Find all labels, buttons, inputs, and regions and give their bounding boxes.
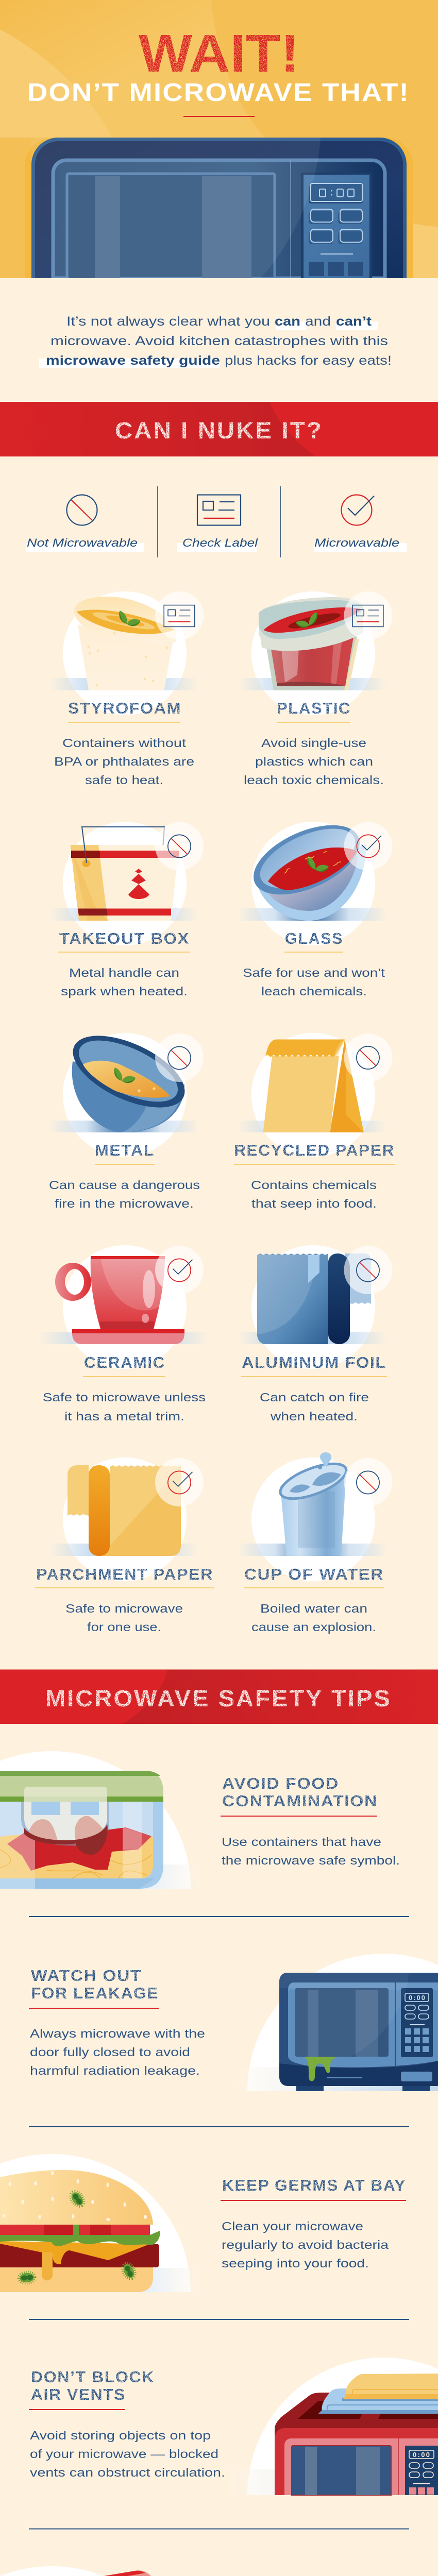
icon: microwavable badge [168,1471,193,1494]
label: not microwavable: Not Microwavable [27,536,138,549]
panel: don't block air vents [29,2358,438,2495]
intro text [39,314,392,368]
heading: AVOID FOOD [222,1775,339,1792]
description: fire in the microwave. [55,1197,194,1210]
icon: paper bag [263,1040,364,1132]
icon: check label badge [164,605,195,626]
panel: glass [238,811,393,998]
description [222,1835,400,1867]
panel: open containers carefully [0,2566,400,2576]
description [244,736,384,787]
icon: leaking microwave [279,1973,438,2091]
banner: can i nuke it: CAN I NUKE IT? [115,417,323,444]
intro text: can’t [336,314,372,329]
heading: FOR LEAKAGE [31,1985,159,2002]
description: leach chemicals. [261,985,367,998]
legend [26,486,407,557]
icon: glass bowl [243,811,370,921]
icon: microwavable badge [168,1259,193,1282]
description: plastics which can [255,755,373,768]
panel: takeout box [49,822,204,998]
panel: ceramic [39,1245,209,1423]
description: Safe to microwave unless [43,1391,206,1404]
description [243,966,385,998]
description: Containers without [62,736,187,750]
description: Can catch on fire [260,1391,369,1404]
banner: microwave safety tips [0,1669,438,1724]
icon: microwave [25,138,413,278]
icon: leaking microwave: 0:00 [409,1994,425,2002]
icon: food container [0,1771,163,1889]
description [222,2219,389,2270]
description: Metal handle can [69,966,179,979]
panel: aluminum foil [238,1245,393,1423]
icon: burger with germs [0,2170,160,2292]
panel: metal [49,1021,204,1210]
icon: water cup [276,1452,350,1556]
heading: STYROFOAM [68,700,181,717]
label: check label: Check Label [182,536,258,549]
intro text: can [275,314,300,329]
intro text: microwave. Avoid kitchen catastrophes with this [50,334,388,348]
heading: RECYCLED PAPER [234,1142,395,1159]
icon: styrofoam cup [74,597,176,690]
heading: METAL [95,1142,155,1159]
icon: takeout box [71,827,179,921]
panel: cup of water [238,1452,393,1634]
heading: don't microwave that: DON’T MICROWAVE THAT! [27,79,410,107]
description [30,2429,225,2479]
heading: PLASTIC [277,700,351,717]
label: microwavable: Microwavable [314,536,399,549]
panel: parchment paper [35,1458,214,1634]
description: seeping into your food. [222,2257,369,2270]
heading: PARCHMENT PAPER [36,1566,213,1583]
panel: styrofoam [49,591,204,787]
description: BPA or phthalates are [54,755,194,768]
banner: can i nuke it [0,402,438,456]
icon: not microwavable [67,495,97,526]
icon: microwavable [341,495,374,526]
description: safe to heat. [85,773,163,787]
description [251,1602,376,1634]
description: cause an explosion. [251,1620,376,1634]
description [30,2027,205,2077]
description: harmful radiation leakage. [30,2064,200,2077]
description: vents can obstruct circulation. [30,2466,225,2479]
hero panel [0,0,438,278]
icon: not microwavable badge [168,835,191,858]
heading: KEEP GERMS AT BAY [222,2177,406,2194]
description: spark when heated. [61,985,188,998]
icon: parchment roll [68,1465,181,1556]
intro text: microwave safety guide [46,353,220,368]
icon: red microwave with towels [275,2374,438,2495]
heading: WATCH OUT [31,1967,142,1985]
icon: not microwavable badge [357,1046,379,1069]
description: leach toxic chemicals. [244,773,384,787]
icon: ceramic mug [55,1256,184,1344]
icon: foil roll [257,1253,371,1344]
description: Use containers that have [222,1835,381,1849]
description: Clean your microwave [222,2219,363,2233]
heading: CUP OF WATER [244,1566,384,1583]
description: Safe for use and won’t [243,966,385,979]
heading: wait: WAIT! [139,24,299,83]
icon: check label badge [352,605,383,626]
heading [31,2368,155,2403]
icon: not microwavable badge [357,1471,379,1494]
description [251,1178,377,1210]
description: Avoid storing objects on top [30,2429,211,2442]
heading: DON’T BLOCK [31,2368,155,2386]
banner: microwave safety tips: MICROWAVE SAFETY TIPS [45,1685,392,1711]
panel: recycled paper [234,1033,395,1210]
description [54,736,194,787]
description: the microwave safe symbol. [222,1854,400,1867]
description: for one use. [87,1620,161,1634]
description [260,1391,369,1423]
description: regularly to avoid bacteria [222,2238,389,2251]
panel: watch out for leakage [29,1954,438,2091]
intro text: plus hacks for easy eats! [225,353,392,368]
heading: ALUMINUM FOIL [242,1354,386,1371]
description: that seep into food. [251,1197,377,1210]
heading: TAKEOUT BOX [59,930,190,947]
icon: open container [0,2570,161,2576]
description: Avoid single-use [261,736,366,750]
description [43,1391,206,1423]
icon: not microwavable badge [168,1046,191,1070]
heading: GLASS [285,930,343,947]
description: door fully closed to avoid [30,2045,190,2059]
description: Contains chemicals [251,1178,377,1192]
heading: CONTAMINATION [222,1792,378,1810]
description [65,1602,183,1634]
description: Always microwave with the [30,2027,205,2040]
title [27,24,410,117]
panel: keep germs at bay [0,2154,406,2292]
icon: metal bowl [62,1021,195,1132]
panel: plastic [238,591,393,787]
description: Boiled water can [260,1602,367,1615]
icon: plastic cup [259,597,363,690]
heading [31,1967,159,2002]
icon: red microwave with towels: 0:00 [413,2451,430,2459]
intro text: It’s not always clear what you [66,314,270,329]
icon: microwavable badge [357,835,381,858]
description: Can cause a dangerous [49,1178,200,1192]
description: it has a metal trim. [64,1410,184,1423]
description: of your microwave — blocked [30,2447,218,2461]
heading: CERAMIC [84,1354,165,1371]
description [49,1178,200,1210]
intro text: and [305,314,331,329]
description [61,966,188,998]
heading [222,1775,378,1810]
panel: avoid food contamination [0,1751,400,1889]
heading: AIR VENTS [31,2386,126,2403]
description: when heated. [270,1410,358,1423]
description: Safe to microwave [65,1602,183,1615]
icon: not microwavable badge [357,1259,379,1282]
icon: check label [197,495,241,526]
